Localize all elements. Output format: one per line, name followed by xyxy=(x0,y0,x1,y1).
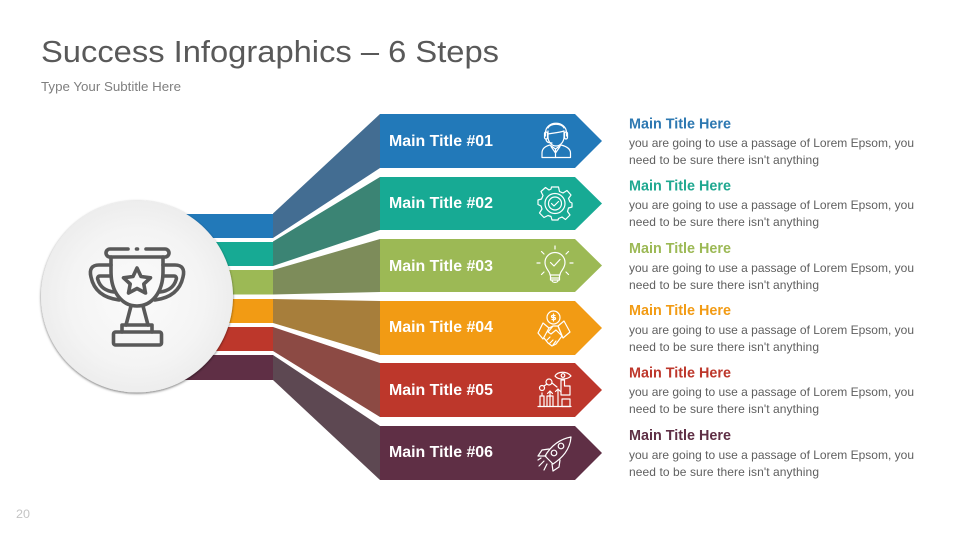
page number: 20 xyxy=(16,507,30,521)
text block 5: Main Title Here xyxy=(629,366,731,382)
funnel stripes xyxy=(180,214,273,380)
text block 2 xyxy=(629,178,914,229)
icon: rocket xyxy=(538,437,571,471)
text block 1: Main Title Here xyxy=(629,116,731,132)
text block 6: need to be sure there isn't anything xyxy=(629,465,819,479)
text block 3: Main Title Here xyxy=(629,241,731,257)
step 6 arrow xyxy=(380,426,602,480)
text block 1: you are going to use a passage of Lorem Epsom, you xyxy=(629,136,914,150)
perspective bands xyxy=(273,114,380,480)
icon: trophy xyxy=(90,249,184,345)
text block 5: need to be sure there isn't anything xyxy=(629,402,819,416)
text block 4: Main Title Here xyxy=(629,303,731,319)
icon: handshake with coin xyxy=(538,311,570,346)
text block 4 xyxy=(629,303,914,354)
text block 5: you are going to use a passage of Lorem Epsom, you xyxy=(629,385,914,399)
step 5 label: Main Title #05 xyxy=(389,382,493,399)
step 1 arrow xyxy=(380,114,602,168)
text block 4: you are going to use a passage of Lorem Epsom, you xyxy=(629,323,914,337)
step 2 label: Main Title #02 xyxy=(389,195,493,212)
text block 5 xyxy=(629,366,914,416)
central circle xyxy=(41,200,233,392)
text block 4: need to be sure there isn't anything xyxy=(629,340,819,354)
subtitle: Type Your Subtitle Here xyxy=(41,80,181,94)
text block 2: Main Title Here xyxy=(629,178,731,194)
text block 3 xyxy=(629,241,914,292)
text block 3: need to be sure there isn't anything xyxy=(629,278,819,292)
text block 1 xyxy=(629,116,914,167)
step 5 arrow xyxy=(380,363,602,417)
text block 6: you are going to use a passage of Lorem Epsom, you xyxy=(629,448,914,462)
step 4 label: Main Title #04 xyxy=(389,319,493,336)
text block 3: you are going to use a passage of Lorem Epsom, you xyxy=(629,261,914,275)
step 3 arrow xyxy=(380,239,602,292)
icon: support agent xyxy=(542,123,570,158)
text block 2: you are going to use a passage of Lorem Epsom, you xyxy=(629,198,914,212)
text block 2: need to be sure there isn't anything xyxy=(629,215,819,229)
step 4 arrow xyxy=(380,301,602,355)
icon: gear check xyxy=(538,187,572,220)
step 6 label: Main Title #06 xyxy=(389,444,493,461)
icon: growth chart and hand xyxy=(538,372,571,406)
step 3 label: Main Title #03 xyxy=(389,258,493,275)
title: Success Infographics – 6 Steps xyxy=(41,35,499,69)
step 1 label: Main Title #01 xyxy=(389,133,493,150)
text block 6 xyxy=(629,428,914,479)
text block 1: need to be sure there isn't anything xyxy=(629,153,819,167)
text block 6: Main Title Here xyxy=(629,428,731,444)
icon: light bulb xyxy=(537,246,573,282)
step 2 arrow xyxy=(380,177,602,230)
